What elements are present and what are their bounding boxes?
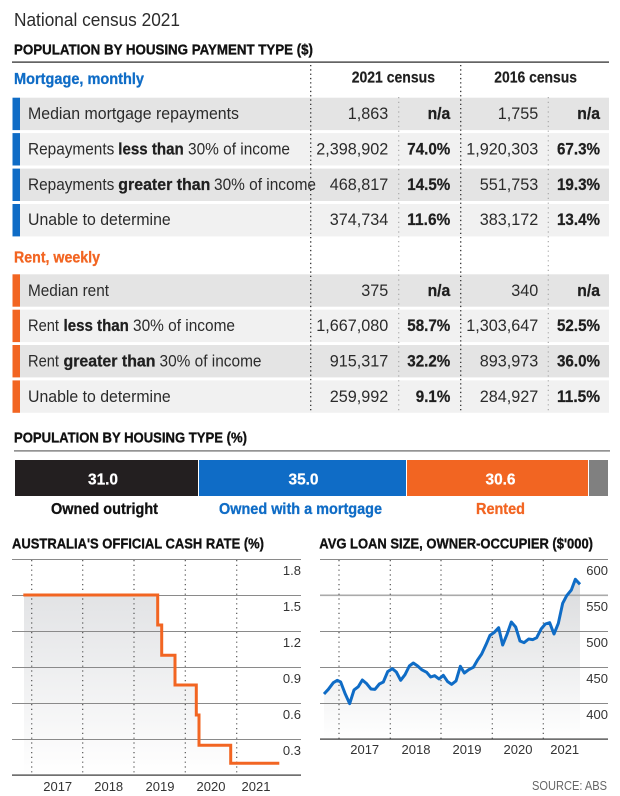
row: median mortgage repayments <box>28 104 601 123</box>
row: repayments less than 30%: 67.3% <box>557 139 600 158</box>
panel: rent table <box>12 250 609 413</box>
row: mortgage unable to determine: 13.4% <box>557 210 600 229</box>
row: rent less than 30% <box>28 316 600 335</box>
segment: owned with a mortgage: 35.0 <box>288 472 319 488</box>
label: owned outright: Owned outright <box>51 501 159 518</box>
x axis labels: 2018 <box>402 742 430 757</box>
x axis labels: 2021 <box>550 742 579 757</box>
row: repayments less than 30%: 30% of income <box>188 140 290 158</box>
row: rent unable to determine: 259,992 <box>330 388 388 406</box>
row: rent less than 30%: Rent <box>28 317 59 335</box>
row backgrounds and markers <box>12 98 609 236</box>
row: rent less than 30%: 30% of income <box>133 317 235 335</box>
row: rent unable to determine: 11.5% <box>557 387 600 406</box>
y axis labels: 0.9 <box>283 671 301 686</box>
row: median rent: Median rent <box>28 282 109 300</box>
y axis labels: 1.8 <box>283 563 301 578</box>
chart heading: cash rate: AUSTRALIA'S OFFICIAL CASH RATE (%) <box>12 536 264 552</box>
y axis labels: 0.6 <box>283 707 301 722</box>
row: rent greater than 30% <box>28 352 600 370</box>
y axis labels: 1.2 <box>283 635 301 650</box>
heading: population by housing payment type: POPULATION BY HOUSING PAYMENT TYPE ($) <box>14 42 313 58</box>
loan size line <box>324 579 580 704</box>
segment: owned outright <box>15 460 198 496</box>
row: repayments greater than 30%: 551,753 <box>480 176 538 194</box>
x axis labels: 2018 <box>94 779 123 794</box>
title: National census 2021 <box>14 9 180 30</box>
row: repayments less than 30%: 2,398,902 <box>316 140 388 158</box>
row: repayments less than 30%: Repayments <box>28 140 114 158</box>
row: rent less than 30%: less than <box>64 317 129 335</box>
row: mortgage unable to determine: 11.6% <box>407 210 451 229</box>
x axis labels: 2017 <box>350 742 379 757</box>
chart: official cash rate <box>12 536 301 794</box>
row: repayments less than 30%: less than <box>118 140 184 158</box>
x axis labels: 2020 <box>197 779 225 794</box>
heading: population by housing type: POPULATION BY HOUSING TYPE (%) <box>14 431 247 447</box>
y axis labels: 400 <box>586 707 608 722</box>
row: repayments greater than 30%: 19.3% <box>557 175 600 194</box>
stacked bar: housing type <box>15 460 608 518</box>
row: median rent <box>28 281 601 300</box>
segment: owned outright: 31.0 <box>88 472 118 488</box>
row: repayments less than 30%: 1,920,303 <box>466 140 538 158</box>
row: mortgage unable to determine: 383,172 <box>480 211 538 229</box>
x axis labels: 2017 <box>43 779 72 794</box>
x axis labels: 2021 <box>242 779 270 794</box>
y axis labels: 450 <box>586 671 608 686</box>
panel: mortgage table <box>12 71 609 236</box>
row: repayments greater than 30%: greater than <box>118 176 210 194</box>
row: median rent: n/a <box>428 281 451 300</box>
cash rate line <box>23 595 279 763</box>
row: repayments less than 30% <box>28 139 600 158</box>
source: SOURCE: ABS <box>532 778 607 793</box>
y axis labels: 550 <box>586 599 608 614</box>
cash rate area <box>24 595 279 775</box>
segment: other <box>589 460 608 496</box>
row: rent less than 30%: 1,303,647 <box>466 317 538 335</box>
y axis labels: 0.3 <box>283 743 301 758</box>
y axis labels: 1.5 <box>283 599 301 614</box>
row: rent greater than 30%: Rent <box>28 352 59 370</box>
label: owned with a mortgage: Owned with a mortgage <box>219 501 382 518</box>
label: rented: Rented <box>476 501 525 518</box>
x axis labels: 2019 <box>453 742 481 757</box>
mortgage subheading: Mortgage, monthly <box>14 71 144 88</box>
row: rent less than 30%: 58.7% <box>407 316 451 335</box>
row: rent greater than 30%: 915,317 <box>330 352 388 370</box>
rent subheading: Rent, weekly <box>14 250 100 266</box>
row: median mortgage repayments: Median mortgage repayments <box>28 105 239 123</box>
segment: owned with a mortgage <box>199 460 406 496</box>
row: rent unable to determine: 9.1% <box>416 387 451 406</box>
column header: 2021 census: 2021 census <box>352 70 435 87</box>
row: median rent: n/a <box>577 281 601 300</box>
rent row backgrounds and markers <box>12 274 609 413</box>
x axis labels <box>43 779 270 794</box>
row: median mortgage repayments: 1,863 <box>348 105 388 123</box>
row: median mortgage repayments: 1,755 <box>498 105 538 123</box>
row: rent unable to determine: Unable to determine <box>28 388 171 406</box>
row: repayments greater than 30%: 30% of income <box>214 176 316 194</box>
row: rent unable to determine: 284,927 <box>480 388 538 406</box>
row: repayments greater than 30%: Repayments <box>28 176 114 194</box>
row: repayments greater than 30%: 468,817 <box>330 176 388 194</box>
row: rent greater than 30%: 36.0% <box>557 352 600 370</box>
x axis labels: 2019 <box>146 779 174 794</box>
row: rent greater than 30%: 30% of income <box>160 352 262 370</box>
row: mortgage unable to determine: Unable to determine <box>28 211 171 229</box>
chart: average loan size <box>319 536 608 757</box>
row: mortgage unable to determine <box>28 210 600 229</box>
x axis labels <box>350 742 579 757</box>
y axis labels: 600 <box>586 563 608 578</box>
y axis labels <box>283 563 301 758</box>
y axis labels: 500 <box>586 635 608 650</box>
loan size area <box>324 579 580 739</box>
row: rent greater than 30%: 893,973 <box>480 352 538 370</box>
row: rent less than 30%: 52.5% <box>557 316 600 335</box>
segment: rented: 30.6 <box>486 472 516 488</box>
row: median rent: 375 <box>361 282 388 300</box>
row: rent unable to determine <box>28 387 600 406</box>
column header: 2016 census: 2016 census <box>494 70 577 87</box>
row: median rent: 340 <box>511 282 538 300</box>
y axis labels <box>586 563 608 722</box>
row: median mortgage repayments: n/a <box>577 104 601 123</box>
x axis labels: 2020 <box>504 742 532 757</box>
segment: rented <box>407 460 588 496</box>
row: repayments less than 30%: 74.0% <box>407 139 451 158</box>
row: repayments greater than 30% <box>28 175 600 194</box>
row: repayments greater than 30%: 14.5% <box>407 175 451 194</box>
row: rent less than 30%: 1,667,080 <box>316 317 388 335</box>
row: rent greater than 30%: greater than <box>64 352 156 370</box>
row: mortgage unable to determine: 374,734 <box>330 211 388 229</box>
row: median mortgage repayments: n/a <box>428 104 451 123</box>
row: rent greater than 30%: 32.2% <box>407 352 451 370</box>
